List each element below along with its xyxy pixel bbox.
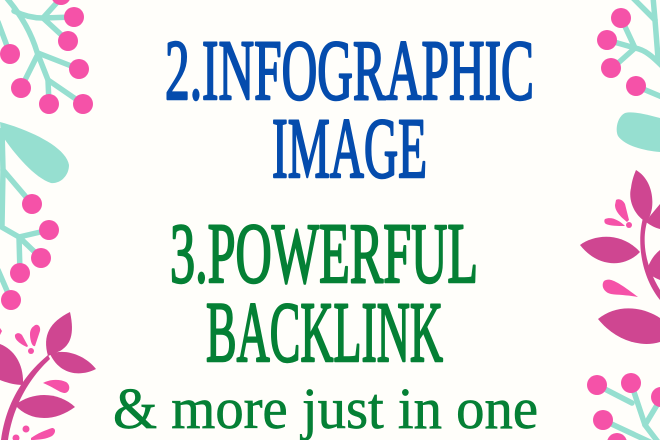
magenta leaves and stem left xyxy=(0,312,96,440)
pink drops left xyxy=(0,325,69,440)
text: and more just in one: & more just in one xyxy=(113,376,538,440)
teal branches bottom-right xyxy=(597,383,660,440)
pink berries top-left xyxy=(0,0,93,114)
pink berries top-right xyxy=(597,8,646,96)
panel: bottom-right berries xyxy=(587,373,660,440)
panel: top-right floral decoration xyxy=(597,0,660,152)
panel: bottom-left magenta plant xyxy=(0,312,96,440)
teal branches top-right xyxy=(607,0,660,97)
pink berries bottom-right xyxy=(587,373,660,440)
teal stems mid-left xyxy=(0,130,49,300)
pink berries mid-left xyxy=(1,194,59,310)
heading: IMAGE: IMAGE xyxy=(272,100,427,196)
teal leaf right xyxy=(617,112,660,152)
magenta leaves and stem right xyxy=(580,170,660,344)
heading: BACKLINK: BACKLINK xyxy=(206,284,443,380)
panel: top-left floral decoration xyxy=(0,0,93,114)
teal leaf left xyxy=(0,122,69,183)
pink drops right xyxy=(603,199,638,297)
panel: mid-left leaf and berries xyxy=(0,122,69,310)
teal branches top-left xyxy=(0,0,83,104)
panel: right magenta plant xyxy=(580,170,660,344)
